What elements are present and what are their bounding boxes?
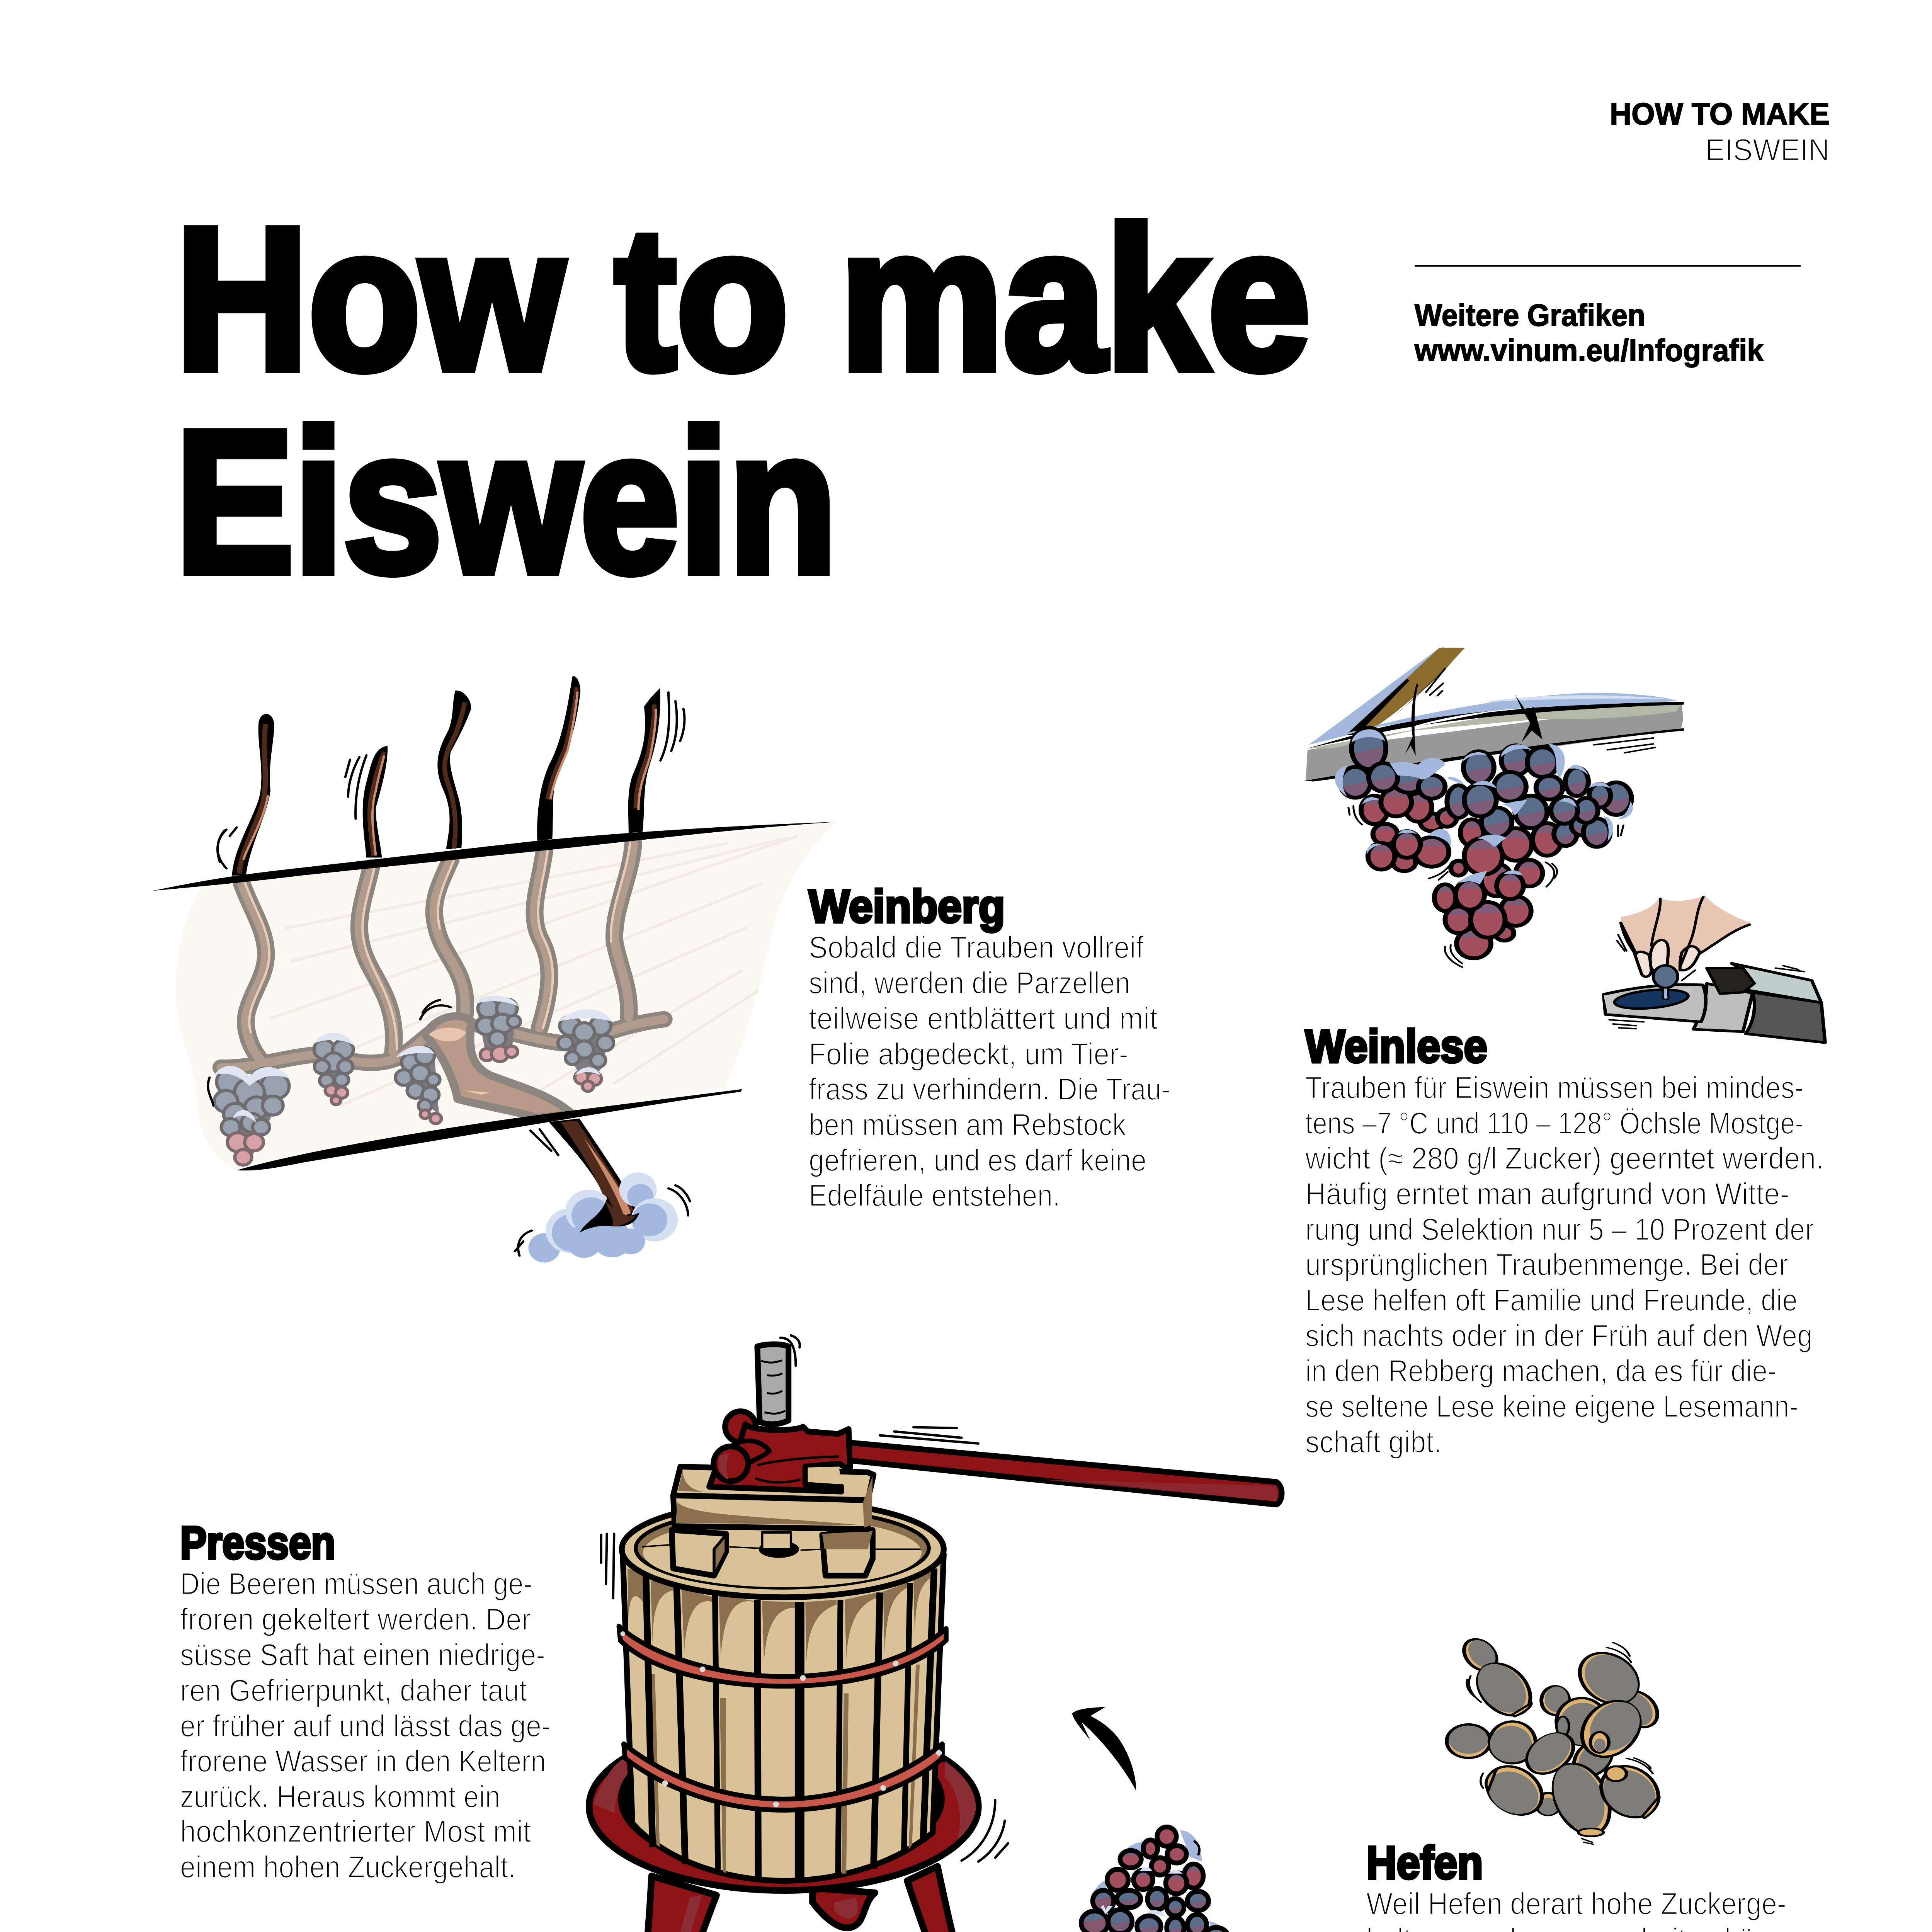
heading and text: Pressen: ren Gefrierpunkt, daher taut — [180, 1673, 527, 1708]
heading and text: Weinberg: Edelfäule entstehen. — [809, 1178, 1060, 1213]
heading and text: Weinberg — [809, 881, 1170, 1213]
motion strokes — [601, 1335, 1008, 1932]
heading and text: Pressen: zurück. Heraus kommt ein — [180, 1779, 500, 1814]
illustration: hand with refractometer — [1604, 895, 1825, 1043]
heading and text: Weinlese: rung und Selektion nur 5 – 10 Prozent der — [1305, 1212, 1814, 1247]
heading and text: Weinlese: Häufig erntet man aufgrund von Witte- — [1305, 1177, 1789, 1211]
more graphics link block — [1414, 265, 1801, 367]
heading and text: Weinberg: sind, werden die Parzellen — [809, 966, 1130, 1000]
heading and text: Weinberg: Weinberg — [809, 881, 1005, 932]
heading and text: Weinlese: Weinlese — [1305, 1020, 1487, 1072]
press blocks — [672, 1530, 726, 1576]
press handle — [849, 1442, 1282, 1505]
heading and text: Weinlese: in den Rebberg machen, da es für die- — [1305, 1354, 1777, 1388]
heading and text: Weinberg: Folie abgedeckt, um Tier- — [809, 1037, 1128, 1071]
illustration: frozen grapes on branch — [1304, 646, 1684, 967]
heading and text: Pressen: süsse Saft hat einen niedrige- — [180, 1638, 545, 1672]
red grapes — [1361, 788, 1561, 958]
heading and text: Weinberg: ben müssen am Rebstock — [809, 1107, 1126, 1142]
heading and text: Pressen: Pressen — [180, 1517, 335, 1569]
illustration: wine press — [589, 1335, 1282, 1932]
heading and text: Weinlese: schaft gibt. — [1305, 1425, 1442, 1459]
foil-covered grape clusters — [214, 995, 614, 1165]
illustration: yeast cells — [1447, 1637, 1666, 1844]
barrel body — [623, 1554, 944, 1881]
wire bottom — [237, 1089, 742, 1170]
press legs — [612, 1866, 978, 1932]
heading and text: Weinlese: Trauben für Eiswein müssen bei mindes- — [1305, 1070, 1804, 1105]
heading and text: Pressen: frorene Wasser in den Keltern — [180, 1744, 546, 1778]
heading and text: Weinlese: sich nachts oder in der Früh auf den Weg — [1305, 1318, 1813, 1353]
heading and text: Weinlese: tens –7 °C und 110 – 128° Öchsle Mostge- — [1305, 1106, 1804, 1140]
snow caps on grapes — [1335, 729, 1633, 884]
arrow — [1072, 1707, 1136, 1791]
illustration: vine under protective foil — [153, 676, 837, 1262]
motion strokes — [1349, 668, 1655, 967]
heading and text: Pressen: einem hohen Zuckergehalt. — [180, 1850, 516, 1884]
blue grapes — [1340, 728, 1631, 847]
heading and text: Weinberg: Sobald die Trauben vollreif — [809, 930, 1144, 964]
canes above wire — [232, 676, 660, 876]
heading and text: Hefen — [1366, 1837, 1823, 1932]
title: Eiswein — [175, 389, 837, 614]
refractometer body — [1693, 983, 1753, 1032]
motion strokes — [208, 692, 690, 1256]
heading and text: Weinberg: frass zu verhindern. Die Trau- — [809, 1072, 1170, 1106]
barrel hoops — [619, 1626, 946, 1686]
press iron screw head — [757, 1344, 789, 1424]
heading and text: Hefen: Hefen — [1366, 1837, 1483, 1889]
barrel shading — [628, 1568, 930, 1874]
heading and text: Weinberg: gefrieren, und es darf keine — [809, 1143, 1146, 1177]
heading and text: Hefen: Weil Hefen derart hohe Zuckerge- — [1366, 1886, 1786, 1921]
heading and text: Weinberg: teilweise entblättert und mit — [809, 1001, 1158, 1036]
barrel rim — [622, 1501, 944, 1597]
heading and text: Pressen — [180, 1517, 551, 1884]
heading and text: Weinlese: Lese helfen oft Familie und Freunde, die — [1305, 1283, 1798, 1317]
heading and text: Weinlese: wicht (≈ 280 g/l Zucker) geerntet werden. — [1305, 1141, 1824, 1175]
more graphics link block: Weitere Grafiken — [1415, 298, 1645, 332]
heading and text: Pressen: er früher auf und lässt das ge- — [180, 1709, 551, 1743]
wire top — [153, 822, 837, 891]
snow at vine base — [529, 1172, 678, 1262]
illustration: pile of frozen grapes — [1051, 1827, 1243, 1932]
section label: How to make Eiswein: HOW TO MAKE — [1610, 97, 1830, 131]
section label: How to make Eiswein: EISWEIN — [1705, 133, 1830, 167]
heading and text: Weinlese — [1305, 1020, 1824, 1459]
title — [175, 186, 1310, 614]
section label: How to make Eiswein — [1610, 97, 1830, 167]
heading and text: Weinlese: se seltene Lese keine eigene Lesemann- — [1305, 1389, 1798, 1423]
heading and text: Pressen: froren gekeltert werden. Der — [180, 1602, 531, 1636]
more graphics link block: www.vinum.eu/Infografik — [1414, 333, 1764, 367]
heading and text: Pressen: Die Beeren müssen auch ge- — [180, 1566, 532, 1601]
press base ring — [589, 1722, 978, 1890]
title: How to make — [175, 186, 1310, 412]
barrel staves — [646, 1568, 934, 1881]
heading and text: Pressen: hochkonzentrierter Most mit — [180, 1814, 531, 1849]
heading and text: Weinlese: ursprünglichen Traubenmenge. Bei der — [1305, 1247, 1788, 1282]
